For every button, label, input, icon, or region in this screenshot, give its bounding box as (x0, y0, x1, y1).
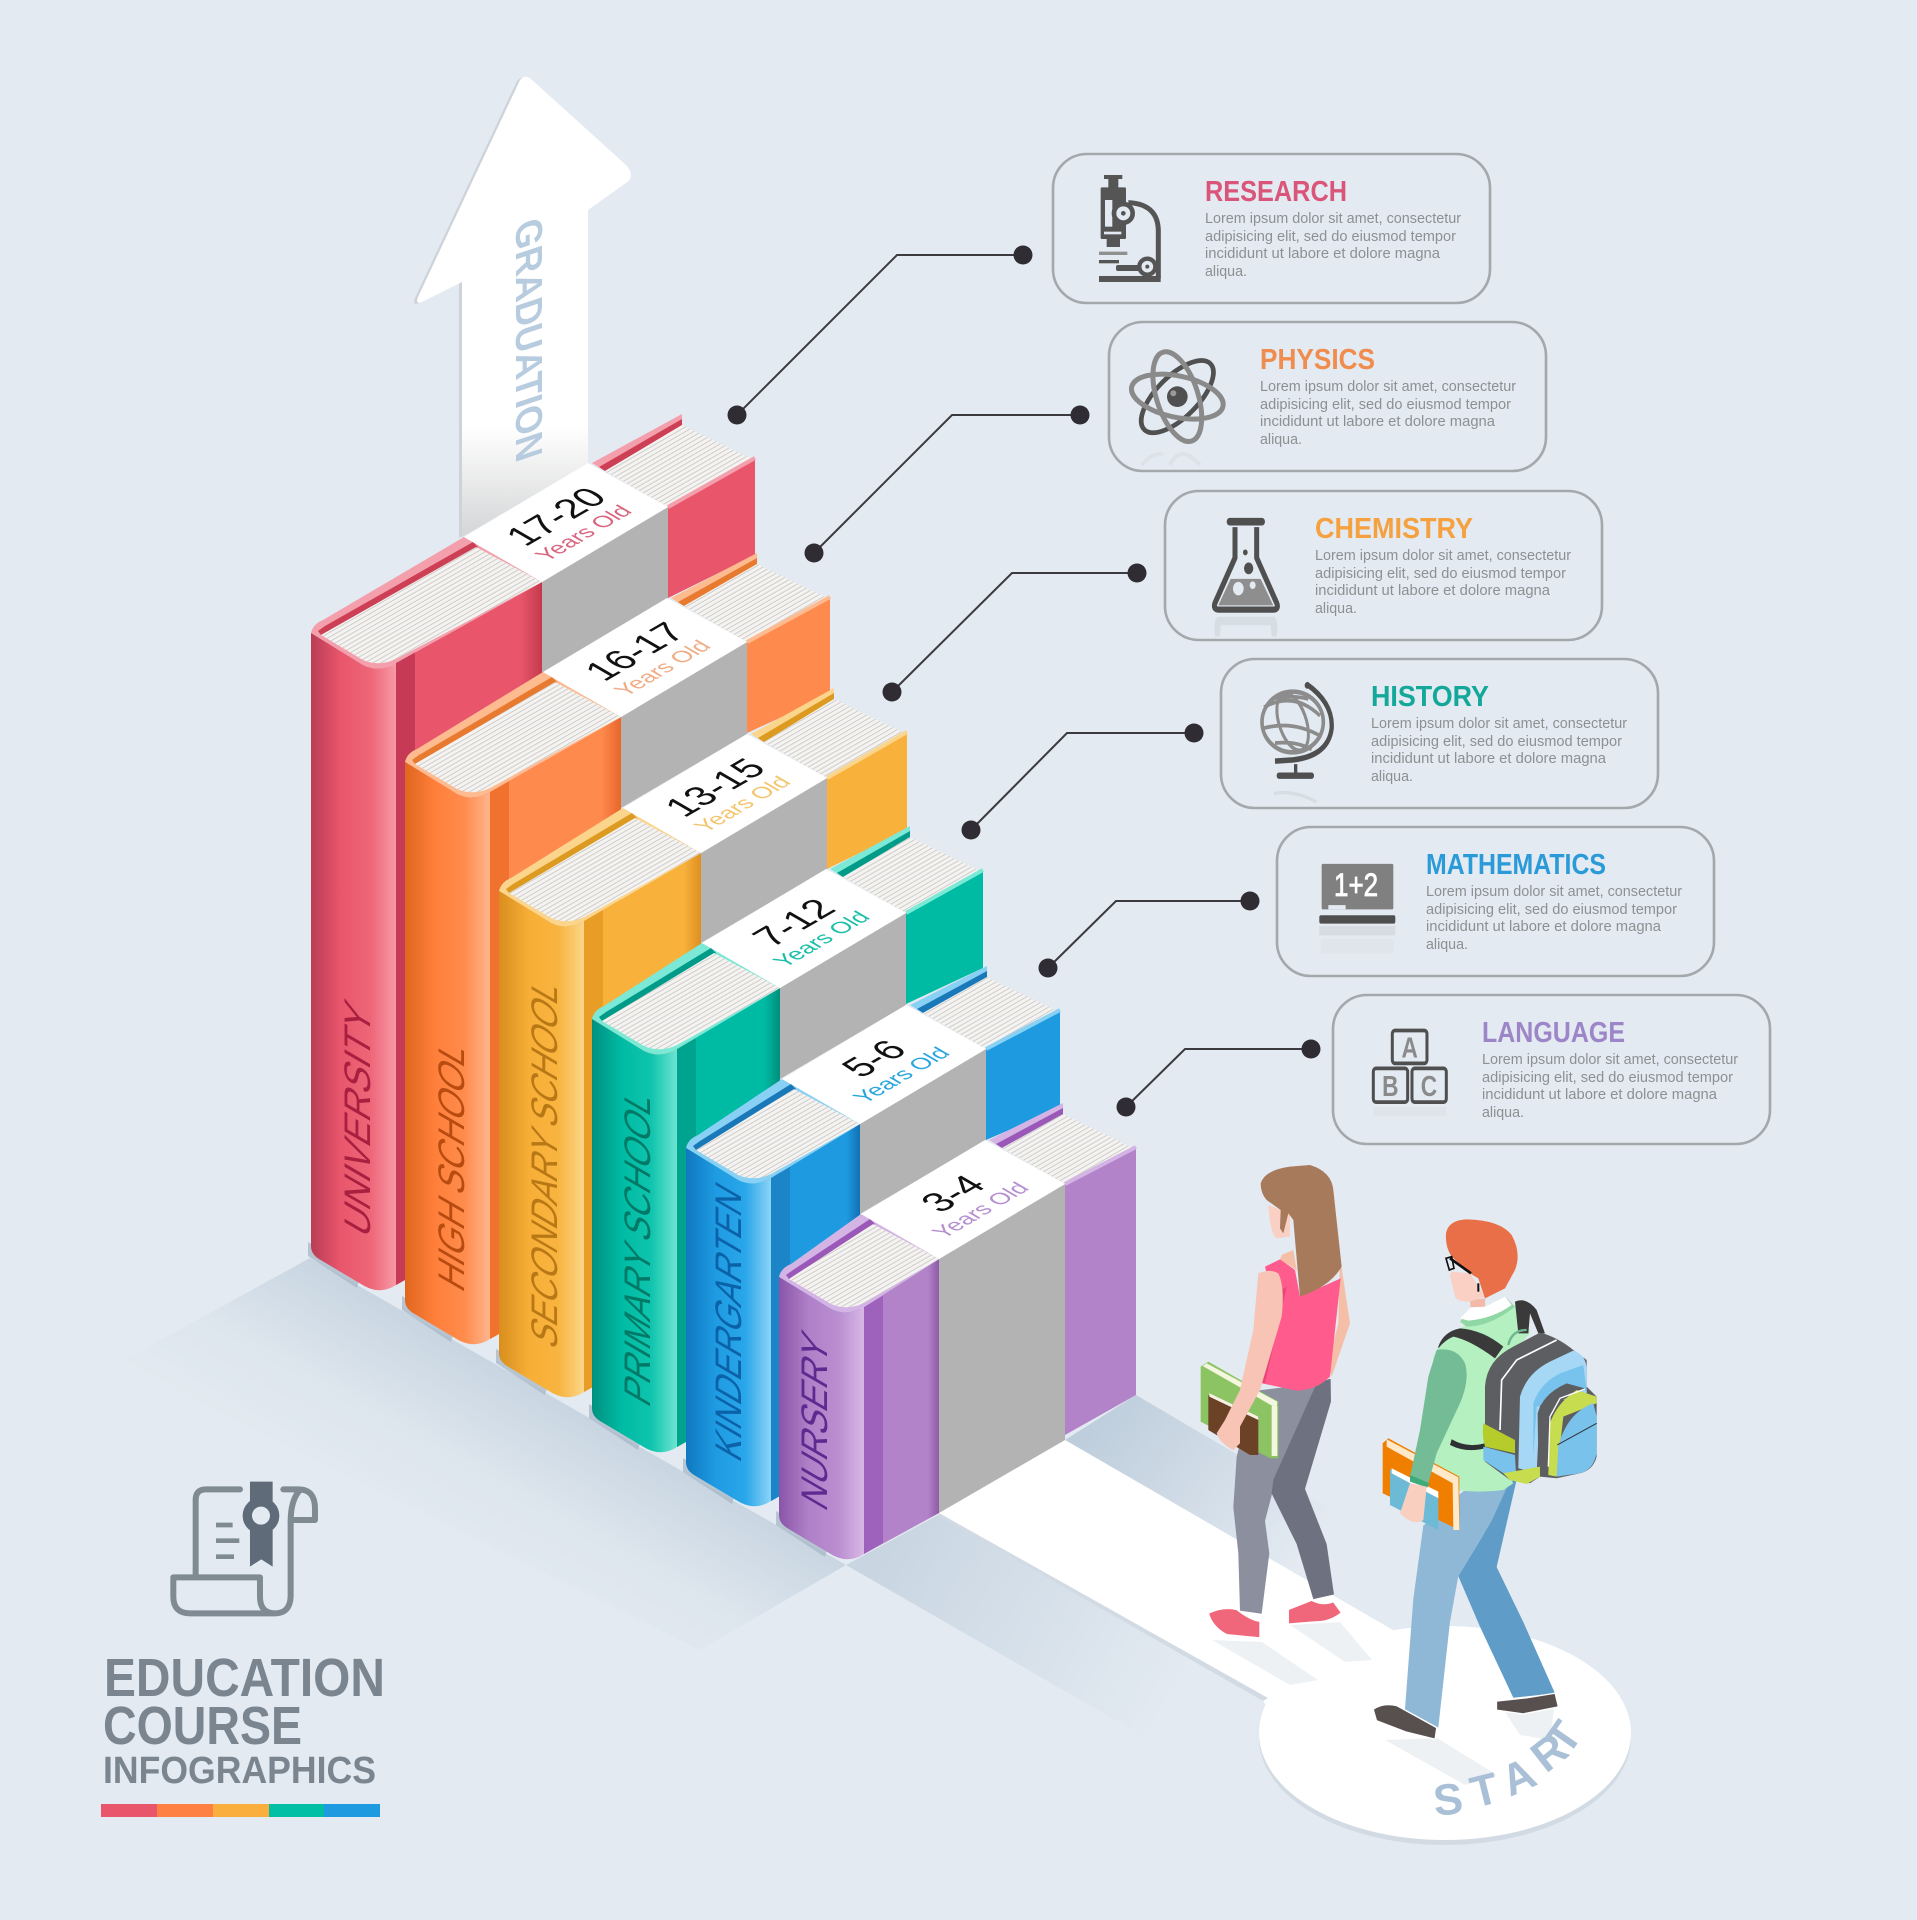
title: EDUCATION (104, 1648, 385, 1708)
body text: incididunt ut labore et dolore magna (1371, 750, 1607, 767)
stair and label: 17-20 (464, 463, 668, 673)
person: woman (1201, 1165, 1350, 1638)
connector: mathematics (1038, 892, 1260, 978)
body text (1205, 210, 1461, 280)
legs and shoes (1208, 1379, 1342, 1638)
connector: research (728, 246, 1032, 424)
body text: Lorem ipsum dolor sit amet, consectetur (1482, 1051, 1738, 1068)
colour bar (101, 1804, 380, 1817)
icon: blackboard: 1+2 (1334, 867, 1378, 904)
stair and label: 17-20: Years Old (529, 501, 637, 565)
icon: alphabet blocks: A (1401, 1033, 1418, 1064)
heading: RESEARCH (1205, 176, 1347, 208)
connector: language (1116, 1040, 1320, 1116)
book: nursery (776, 1103, 1136, 1559)
spine title: HIGH SCHOOL (431, 1031, 473, 1299)
stair and label: 16-17: 16-17 (576, 617, 696, 687)
body text (1426, 883, 1682, 953)
card: mathematics (1277, 827, 1714, 976)
graduation text: GRADUATION (508, 213, 550, 467)
book staircase (308, 414, 1136, 1559)
graduation arrow (414, 77, 631, 538)
stair and label: 13-15 (623, 734, 827, 943)
card: chemistry (1165, 491, 1602, 640)
body text: aliqua. (1371, 768, 1413, 785)
body text: incididunt ut labore et dolore magna (1205, 245, 1441, 262)
body text: adipisicing elit, sed do eiusmod tempor (1315, 565, 1566, 582)
body text: aliqua. (1315, 600, 1357, 617)
body text (1371, 715, 1627, 785)
stair and label: 13-15: Years Old (688, 772, 796, 836)
book: primary school (589, 826, 983, 1452)
body text: aliqua. (1482, 1104, 1524, 1121)
body text: incididunt ut labore et dolore magna (1426, 918, 1662, 935)
body text: Lorem ipsum dolor sit amet, consectetur (1371, 715, 1627, 732)
connector: history (962, 724, 1204, 840)
card: language (1333, 995, 1770, 1144)
body text: incididunt ut labore et dolore magna (1315, 582, 1551, 599)
body text: aliqua. (1426, 936, 1468, 953)
heading: PHYSICS (1260, 344, 1375, 376)
start path and circle (939, 1440, 1631, 1845)
floor shadows (119, 1258, 1393, 1740)
body text: adipisicing elit, sed do eiusmod tempor (1205, 228, 1456, 245)
start label: START (1431, 1713, 1592, 1826)
body text: adipisicing elit, sed do eiusmod tempor (1482, 1069, 1733, 1086)
spine title: SECONDARY SCHOOL (524, 969, 566, 1356)
stair and label: 16-17 (543, 598, 747, 808)
spine title: UNIVERSITY (337, 993, 379, 1245)
heading: CHEMISTRY (1315, 513, 1473, 545)
body text: Lorem ipsum dolor sit amet, consectetur (1315, 547, 1571, 564)
stair and label: 7-12 (702, 869, 906, 1079)
foot shadows (1212, 1622, 1555, 1785)
spine title: PRIMARY SCHOOL (617, 1080, 659, 1414)
body text: incididunt ut labore et dolore magna (1482, 1086, 1718, 1103)
card: research (1053, 154, 1490, 303)
icon: globe (1262, 682, 1332, 802)
stair and label: 3-4 (861, 1140, 1065, 1513)
icon: flask (1214, 518, 1277, 637)
emblem: diploma scroll (173, 1482, 315, 1613)
icon: atom (1127, 346, 1227, 465)
body text: adipisicing elit, sed do eiusmod tempor (1426, 901, 1677, 918)
icon: alphabet blocks (1373, 1031, 1446, 1116)
legs and shoes (1373, 1480, 1558, 1739)
stair and label: 3-4: 3-4 (912, 1170, 995, 1218)
heading: LANGUAGE (1482, 1017, 1625, 1049)
book: secondary school (496, 688, 907, 1397)
stair and label: 17-20: 17-20 (497, 482, 617, 552)
connector: chemistry (882, 564, 1146, 702)
card: history (1221, 659, 1658, 808)
book: high school (402, 553, 830, 1344)
body text (1482, 1051, 1738, 1121)
body text: aliqua. (1205, 263, 1247, 280)
stair and label: 13-15: 13-15 (656, 753, 776, 823)
body text: Lorem ipsum dolor sit amet, consectetur (1205, 210, 1461, 227)
stair and label: 5-6: Years Old (847, 1043, 955, 1107)
spine title: KINDERGARTEN (708, 1175, 750, 1469)
body text: Lorem ipsum dolor sit amet, consectetur (1260, 378, 1516, 395)
person: man (1373, 1219, 1597, 1739)
icon: alphabet blocks: C (1421, 1071, 1437, 1102)
heading: HISTORY (1371, 681, 1489, 713)
body text (1260, 378, 1516, 448)
body text (1315, 547, 1571, 617)
icon: microscope (1099, 175, 1161, 282)
stair and label: 5-6 (782, 1005, 986, 1214)
upper body and books (1201, 1165, 1350, 1458)
card: physics (1109, 322, 1546, 471)
body text: adipisicing elit, sed do eiusmod tempor (1371, 733, 1622, 750)
body text: incididunt ut labore et dolore magna (1260, 413, 1496, 430)
connector: physics (804, 406, 1090, 562)
icon: alphabet blocks: B (1382, 1071, 1398, 1102)
title: INFOGRAPHICS (103, 1750, 376, 1792)
upper body, books and backpack (1383, 1219, 1597, 1530)
stair and label: 3-4: Years Old (926, 1178, 1034, 1242)
heading: MATHEMATICS (1426, 849, 1606, 881)
stair and label: 16-17: Years Old (608, 636, 716, 700)
body text: Lorem ipsum dolor sit amet, consectetur (1426, 883, 1682, 900)
stair and label: 7-12: Years Old (767, 907, 875, 971)
body text: aliqua. (1260, 431, 1302, 448)
title (103, 1648, 385, 1792)
stair and label: 7-12: 7-12 (744, 893, 845, 953)
title: COURSE (103, 1696, 302, 1756)
icon: blackboard (1319, 864, 1395, 954)
book: kindergarten (683, 966, 1060, 1506)
body text: adipisicing elit, sed do eiusmod tempor (1260, 396, 1511, 413)
book: university (308, 414, 755, 1290)
spine title: NURSERY (794, 1324, 836, 1518)
stair and label: 5-6: 5-6 (833, 1035, 916, 1083)
